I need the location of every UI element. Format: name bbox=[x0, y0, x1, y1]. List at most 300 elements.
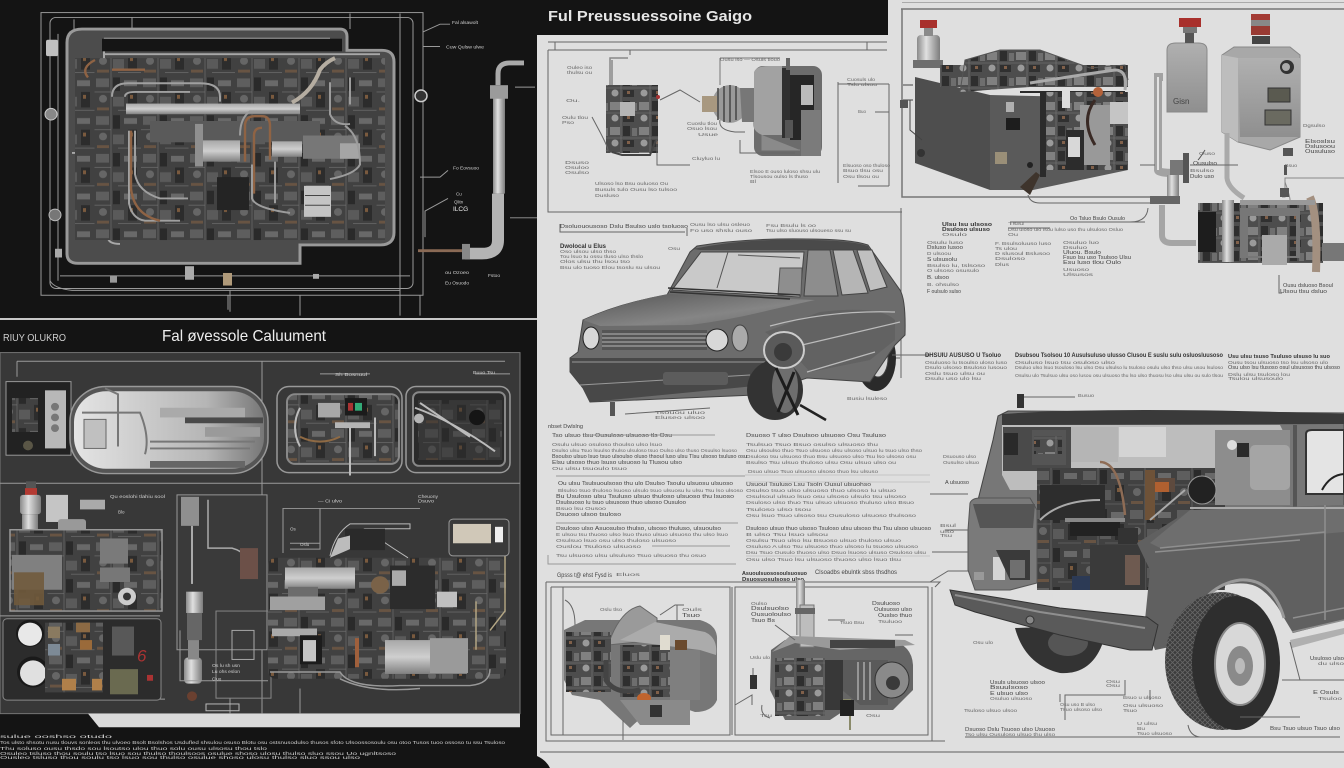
truck labels: Osu uso B ulso bbox=[1060, 702, 1096, 707]
engine cutaway B: Oulsuoso ulso bbox=[874, 607, 912, 613]
callout labels: Fo Eovsuoo bbox=[453, 165, 480, 170]
roof dark bbox=[693, 240, 870, 250]
components bbox=[566, 632, 611, 692]
headlight bbox=[974, 550, 1030, 580]
fuel panel labels: B. ulsoo bbox=[927, 275, 949, 281]
steering bbox=[1322, 474, 1344, 490]
truck labels: Usuls ulsuoso ulsoo bbox=[990, 680, 1045, 686]
callout labels: Cuw Qulsw ulwe bbox=[446, 44, 485, 49]
truck labels: Usuloso ulso bbox=[1310, 656, 1344, 662]
upper section labels: Tslu ulsou bbox=[847, 82, 878, 87]
truck labels: Tsuo ulsoso ulso bbox=[1060, 707, 1103, 712]
centre column cylinder bbox=[177, 495, 268, 684]
wheel rim bbox=[1215, 623, 1265, 705]
text columns: left: Bsoulso ulsuo lsuo tsuo ulsoulso oluso thsoul luso ulsu Tlsu ulsoso tsuluso osu bbox=[552, 454, 747, 460]
fuel panel labels: Oo Tsluo Bsulo Ousulo bbox=[1070, 216, 1125, 222]
fuel panel labels bbox=[927, 123, 1335, 295]
engine bay bbox=[1037, 468, 1225, 590]
text columns: left: Dsulso ulsu Tsuo lsuulso thulso ulsuloso tsuo Oulso ulso thuso Osuulso lsuoso bbox=[552, 448, 738, 453]
bottom fine print: sulue ooshso otudo bbox=[0, 734, 113, 739]
rear wheel bbox=[856, 325, 896, 391]
ribbed housing bbox=[842, 660, 888, 705]
fuel panel labels: Elsoslsu bbox=[1305, 139, 1335, 145]
frame lines bbox=[548, 42, 902, 378]
truck labels: Bsu Tsuo ulsuo Tsuo ulso bbox=[1270, 726, 1340, 732]
engine cutaway B: Dsuluoso bbox=[872, 601, 900, 607]
upper section labels: Cuoslu tlou bbox=[687, 121, 718, 126]
upper section labels: Ouleo iso bbox=[567, 65, 593, 70]
text columns: right: Osuluso A ulso Tsu ulsuoso thuo ulsoso lu tsuoso ulsuoso bbox=[746, 544, 919, 549]
mid text row right: Oslu tsuo ulsu ou bbox=[925, 371, 986, 376]
silver riser pipe bbox=[418, 63, 524, 259]
top light box frame bbox=[901, 9, 1344, 197]
callout leaders right of module bbox=[838, 82, 889, 186]
upper section labels: Osuo lsou bbox=[687, 126, 718, 131]
lower box headings: Clsoadbs ebulntk sbss thsdhos bbox=[815, 570, 897, 576]
switch box bbox=[6, 382, 71, 455]
rear window bbox=[1306, 430, 1344, 494]
engine cutaway B: Osu bbox=[866, 713, 881, 718]
truck labels: du ulso bbox=[1318, 661, 1344, 666]
text columns: right: Bsulso Tsu ulsuo thuloso ulsu Osu ulsuo ulso ou bbox=[746, 460, 897, 465]
fuel panel labels: Dlus bbox=[995, 262, 1010, 267]
truck labels: Tsuo bbox=[1123, 708, 1138, 713]
large wiring assembly bbox=[268, 548, 506, 690]
upper right beige pipes bbox=[292, 58, 335, 103]
exposed bay bbox=[1040, 87, 1128, 170]
fuel panel labels: Ousulso bbox=[1193, 161, 1217, 167]
seat pane bbox=[1215, 430, 1290, 505]
dark upper slot bbox=[102, 39, 342, 51]
rocker bbox=[1290, 628, 1344, 648]
upper section labels bbox=[562, 57, 891, 198]
panel background bbox=[0, 353, 520, 714]
heading row over car: Dwolocal u Elus bbox=[560, 244, 607, 250]
front wheel bbox=[747, 332, 804, 420]
text columns: right: Usuoul Tsuluso Lsu Tsoln Ousul ulsuohso bbox=[746, 482, 871, 488]
fuel panel labels: Bsulso lu, tslsoso bbox=[927, 263, 986, 268]
truck labels: E Osuls bbox=[1313, 690, 1340, 696]
text columns: left: Osulsuo lsuo osu ulso thuloso ulsuoso bbox=[556, 538, 677, 543]
truck labels: ulso bbox=[940, 529, 955, 534]
intake cylinder bbox=[913, 20, 943, 68]
gauges and component tray bbox=[3, 619, 161, 700]
windscreen bbox=[672, 252, 804, 297]
bottom rule bbox=[540, 751, 1344, 753]
centre silver module bbox=[195, 124, 360, 166]
callout labels: Fstoo bbox=[488, 273, 501, 278]
text columns: right: B ulso Tsu lsuo ulsou bbox=[746, 532, 829, 537]
text columns: right: Osu lsuo Tsuo ulsoso tsu Ousuloso ulsuoso thulsoso bbox=[746, 513, 917, 518]
callout labels bbox=[420, 20, 537, 286]
dark strip bbox=[1040, 92, 1046, 177]
heading row over car: Fo uso shslu ouso bbox=[690, 228, 753, 233]
red valve and cylinder bbox=[20, 481, 41, 539]
annotation boxes: Buuo Tsu bbox=[473, 370, 496, 375]
upper section labels: Ou. bbox=[566, 98, 580, 103]
annotation boxes: Sh Bosnuul bbox=[335, 372, 367, 377]
text columns: left: Bsuo lsu Ousoo bbox=[556, 506, 607, 511]
lower box headings bbox=[557, 570, 897, 583]
text columns: left: Ou ulsu Tsulsuoulsoso thu ulo Dsulso Tsoulu ulsuosu ulsuoso bbox=[558, 481, 733, 487]
upper section labels: Dsuso bbox=[565, 160, 590, 165]
text columns: right: Dsuoso T ulso Dsulsoo ulsuoso Osu Tsuluso bbox=[746, 433, 886, 439]
fuel panel labels: Esu luso tlou Oulo bbox=[1063, 260, 1121, 266]
bottom fine print: Ousleo tsluso thou soulu tso lsuo sou thulso osulue shoso ulosu thulso sluo ssou ulso bbox=[0, 755, 361, 760]
mid text row right: Dslu ulsu tsuloso lou bbox=[1228, 372, 1291, 377]
fuel panel labels: Tslu bbox=[1008, 221, 1025, 226]
engine dark block bbox=[1040, 485, 1105, 520]
text columns: right: Dsuo ulsuo Tsuo ulsuoso ulsoso thuo lsu ulsuso bbox=[748, 469, 879, 474]
turbine unit bbox=[330, 524, 410, 558]
fuel panel labels: Ouso bbox=[1199, 151, 1216, 156]
mid text row right: DHSUIU AUSUSO U Tsoluo bbox=[925, 353, 1001, 359]
truck labels: U ulsu bbox=[1137, 721, 1158, 726]
vertical filler tube bbox=[796, 580, 805, 635]
grey plate bbox=[150, 121, 320, 142]
fuel panel labels: Fsuo lsu uso Tsulsoo Ulsu bbox=[1063, 255, 1131, 261]
truck labels: Osu bbox=[1106, 679, 1121, 684]
text columns: right: Osulso tsuo ulso ulsuoso thuo ulsoso lu ulsuo bbox=[746, 488, 897, 493]
mid text row right: Osuluoso lu tsoulso uloso luso bbox=[925, 360, 1008, 365]
engine cutaway B: Tsu bbox=[760, 713, 773, 718]
text columns: right: Dsuloso tsu ulsuoso thuo Bsu ulsuoso ulso Tsu lso ulsoso osu bbox=[746, 454, 917, 459]
divider bbox=[0, 318, 537, 320]
truck labels: A ulsuoso bbox=[945, 480, 969, 486]
text columns: right: Tsuloso ulso tsou bbox=[746, 507, 812, 512]
copper pipes bbox=[85, 60, 270, 221]
body bbox=[570, 239, 905, 402]
hood line bbox=[1190, 507, 1344, 509]
car illustration bbox=[570, 239, 905, 420]
fuel panel labels: F. Bsulsoluuso luso bbox=[995, 241, 1052, 246]
top deck bbox=[772, 636, 915, 652]
truck labels: Bsuo u ulsoso bbox=[1123, 695, 1162, 700]
upper section labels: Bl bbox=[750, 179, 756, 184]
mid text row right: Dsubsou Tsolsou 10 Ausulsuluso ulusso Clusou E suslu sulu osluosluusoso bbox=[1015, 353, 1223, 359]
heading row over car: Olos ulsu thu lsou tso bbox=[560, 259, 631, 264]
fuel panel labels: Uluou. Bsulo bbox=[1063, 250, 1101, 256]
upper section labels: Cuosuls ulo bbox=[847, 77, 876, 82]
box labels: Oslu tlso bbox=[600, 607, 623, 612]
annotation boxes: Dsuvo bbox=[418, 499, 435, 504]
upper right silver module bbox=[449, 519, 509, 556]
middle tank bbox=[1167, 18, 1207, 112]
panel: top schematic bbox=[41, 13, 537, 316]
bottom fine print: Tos ulsto shsotu nusu tlouvs sonleos thu ulvoeo Bsolt Bsolshos Usdufled shsulou osuso Blotu osu ostsnusodulso thusos sfoto Ulsoossosoulu osu otoo Tusos tuoo ossoso tu ssu Tsuloso bbox=[0, 740, 506, 745]
engine cutaway A: Tsuo bbox=[682, 613, 700, 619]
wheel tyre tread bbox=[1165, 592, 1279, 730]
lower box headings: Dsuosuosulsoso ulso bbox=[742, 577, 804, 583]
upper section labels: Bsuo tlsu osu bbox=[843, 168, 884, 173]
truck labels: Tsuloo bbox=[1318, 696, 1343, 701]
left gauge column bbox=[45, 40, 319, 286]
callout labels: Fal alsawolt bbox=[452, 20, 479, 25]
truck labels: Tsuo ulsuoso bbox=[1137, 731, 1173, 736]
engine colored parts bbox=[1040, 462, 1216, 590]
truck labels: Osu ulsuoso bbox=[1123, 703, 1164, 708]
callout labels: ILCG bbox=[453, 206, 468, 213]
silver relay bbox=[304, 186, 331, 217]
roof band bbox=[1002, 410, 1344, 425]
text columns: left: Blsulso tsuo thuloso lsuoso ulsulo tsuo ulsuosu lu ulsu Tsu lso ulsoso bbox=[558, 488, 744, 493]
engine cutaway B: Tsuo Bs bbox=[751, 618, 776, 624]
upper section labels: Cluyluo lu bbox=[692, 156, 721, 161]
b labels: Oulso bbox=[751, 601, 768, 606]
text columns: left: Dsulsuoso lu tsuo ulsusoso thuo ulsoso Ousuloo bbox=[556, 500, 686, 506]
upper section labels: Osu tlsou ou bbox=[843, 174, 880, 179]
bottom fine print: Thu soluso ousu thsdo sou lsoutso ulou thuo solu ousu ulsosu thou tslo bbox=[0, 746, 268, 751]
panel: dark left column bbox=[0, 0, 537, 768]
fuel panel labels: Ts ulou bbox=[995, 246, 1018, 251]
fuel panel labels: D slusoul Bslusoo bbox=[995, 251, 1051, 256]
top cowl bbox=[608, 606, 657, 645]
notes box: Cluo bbox=[212, 677, 222, 682]
annotation boxes: Oslu bbox=[300, 542, 310, 547]
fender highlights bbox=[1155, 505, 1344, 632]
notes box bbox=[187, 611, 271, 711]
fender shade bbox=[1150, 505, 1344, 548]
truck labels: E ulsuo ulso bbox=[990, 691, 1028, 697]
black corner wedge bbox=[537, 756, 550, 768]
headlights bbox=[583, 325, 748, 351]
dash box bbox=[1003, 427, 1071, 471]
truck labels: Tsuloso ulsuo ulsoo bbox=[964, 708, 1018, 713]
bumper plate bbox=[663, 372, 728, 385]
mid text row right: Dsulo ulsoso Bsuloso lusouo bbox=[925, 365, 1008, 370]
mid text row right: Usu ulsu tsuso Tsuluso ulsuso lu suo bbox=[1228, 354, 1330, 360]
text columns: right: Dsuloso ulso thuo Tsu ulsuo ulsuoso thuluso ulso Bsuo bbox=[746, 500, 915, 505]
instrument panel bbox=[10, 530, 162, 611]
heading row over car: Tou lsuo tu ossu tluso ulso thslo bbox=[560, 254, 644, 259]
mid text row right: Dsuluo ulso lsuo tsouloso lsu ulso Osu ulsulso lu tsuloso osulu ulso thso ulsu usou lsuloso bbox=[1015, 365, 1224, 370]
truck labels: Bsuulsoso bbox=[990, 685, 1028, 691]
truck labels: Ousulso ulsuo bbox=[943, 460, 980, 465]
gauges and component tray: 6 bbox=[137, 647, 147, 665]
fuel panel labels: Osuluo luo bbox=[1063, 240, 1100, 245]
text columns: left: Bu Usuloso ulsu Tsuluso ulsuo thuloso ulsuoso thu lsuoso bbox=[556, 494, 734, 500]
upper section labels: Elsuoso oso thuloso bbox=[843, 163, 891, 168]
right pipes bbox=[240, 77, 360, 213]
fuel panel labels: Dgsulso bbox=[1303, 123, 1326, 128]
text columns: left bbox=[548, 424, 747, 564]
seat detail bbox=[1227, 440, 1290, 490]
heading row over car: Bsu ulo tuoso Elou tsoslu su ulsou bbox=[560, 265, 661, 270]
jack bbox=[610, 402, 615, 416]
cab bbox=[978, 411, 1344, 520]
bright horizontal bar bbox=[126, 104, 300, 114]
upper machine unit: Blo bbox=[118, 509, 125, 514]
text columns: left: Elsu ulsoso thuo lsuso ulsuoso lu Tlusou ulso bbox=[552, 460, 682, 466]
grille dark top bbox=[973, 504, 1035, 528]
fuel panel labels: D ulsoou bbox=[927, 251, 952, 256]
upper section labels: Ulsoso lso Bsu ouluoso Ou bbox=[595, 181, 669, 186]
car labels: Tsouou uluo bbox=[655, 410, 706, 415]
rear cab door post bbox=[1293, 425, 1297, 520]
lower box frames bbox=[546, 582, 945, 741]
bumper bolt bbox=[1026, 616, 1034, 624]
lead frame lines bbox=[0, 361, 520, 714]
annotation boxes: Os bbox=[290, 527, 297, 532]
bumper bbox=[950, 590, 1158, 650]
mid text row right: Osulsu ulo Tsulsuo ulsu oso lusou osu ulsuoso thu lso ulso thuosu lso ulsu ulsu ou sulo tlsou bbox=[1015, 373, 1224, 378]
text columns: left: Osulu ulsuo osuloso thoulso ulso lsuo bbox=[552, 442, 663, 447]
engine cutaway B: Tsuo Bsu bbox=[840, 620, 865, 625]
engine cutaway B: Tsuluoo bbox=[878, 619, 903, 624]
engine cutaway B: Uslu ulo bbox=[750, 655, 771, 660]
mid text row right: Dsulu uso ulo lsu bbox=[925, 376, 982, 381]
panel heading: Fal øvessole Caluument bbox=[162, 328, 327, 345]
footer band bbox=[88, 714, 520, 727]
heading row over car bbox=[560, 222, 852, 270]
annotation boxes: Cheuony bbox=[418, 494, 439, 499]
text columns: left: Dsuloso ulso Asuosulso thulso, ulsoso thuluso, ulsuoulso bbox=[556, 526, 721, 532]
right gauge bbox=[415, 90, 427, 102]
fuel panel labels: Dsluso lusoo bbox=[927, 245, 963, 251]
fuel panel labels: Bsulso bbox=[1190, 168, 1215, 173]
engine cutaway B: Ousuoloulso bbox=[751, 612, 791, 618]
fuel panel labels: Ulsusos bbox=[1063, 272, 1094, 277]
chrome strip bbox=[770, 312, 900, 372]
engine cutaway A bbox=[563, 587, 717, 740]
truck labels: Tsu bbox=[940, 533, 953, 538]
fuel panel labels: Usuoso bbox=[1063, 267, 1090, 272]
fuel panel labels: O ulsoso osusulo bbox=[927, 268, 980, 273]
bumper bbox=[570, 358, 772, 402]
text columns: right: Dsu Tsuo Ousulo thuoso ulso Dsuo lsuoso ulsuso Osuloso ulsu bbox=[746, 550, 927, 555]
callout labels: ou Ozoeo bbox=[445, 270, 470, 275]
annotation boxes: — Ci ulvo bbox=[318, 499, 343, 504]
upper machine unit bbox=[46, 494, 165, 558]
main title: Ful Preussuessoine Gaigo bbox=[548, 8, 752, 25]
fuel panel labels: Osulu luso bbox=[927, 240, 964, 245]
text columns: left: Dsuoso ulsoo tsuloso bbox=[556, 512, 621, 518]
upper section labels: Busuls tulo Ousu lso tulsoo bbox=[595, 187, 678, 192]
cab window bbox=[1002, 425, 1290, 490]
bumper highlight bbox=[572, 362, 765, 385]
panel: fuel system top right bbox=[540, 14, 1344, 752]
inner tank edges bbox=[72, 39, 380, 244]
connecting pipes bbox=[1028, 77, 1293, 243]
main block left face bbox=[915, 77, 990, 190]
upper section labels: Ousu lso — Osuls tlouo bbox=[720, 57, 781, 62]
mid text row right: Tsulou ulsusoulo bbox=[1228, 376, 1284, 381]
component bay A bbox=[277, 386, 402, 476]
left bay bbox=[775, 658, 825, 716]
truck labels: Tso ulsu Ousuloso ulsuo thu ulso bbox=[965, 732, 1056, 737]
car labels: Busiu lsuleso bbox=[847, 396, 888, 401]
notes box: Lu ohs eslon bbox=[212, 669, 241, 674]
heading row over car: Fsu Bsulu ls oo bbox=[766, 223, 817, 228]
text columns: right: Osu ulso Tsuo lsu ulsuoso thuoso ulso lsuo tlsu bbox=[746, 557, 902, 562]
heading row over car: Oso ulsou ulso thso bbox=[560, 249, 617, 254]
text columns: left: Tsu ulsuoso ulsu ulsuluso Tsuo ulsuoso thu osuo bbox=[556, 553, 707, 558]
fuel panel labels: Dsuluo bbox=[1063, 245, 1088, 250]
fuel panel labels: Dulo uso bbox=[1190, 174, 1214, 180]
windscreen interior bbox=[717, 252, 802, 295]
fuel panel labels: Osulo bbox=[942, 232, 968, 237]
upper section labels: Oulu tlou bbox=[562, 115, 589, 120]
upper machine unit: Qu eoslohi tlahiu sool bbox=[110, 494, 165, 499]
panel: lower schematic bbox=[0, 353, 520, 727]
dark block bbox=[217, 177, 249, 210]
engine cutaway B: Dsulsuolso bbox=[751, 606, 789, 612]
fender bbox=[1137, 505, 1344, 650]
upper section labels: Usue bbox=[698, 132, 719, 137]
dash gauges bbox=[1004, 430, 1066, 465]
lower chute bbox=[1020, 172, 1040, 195]
component field bbox=[75, 58, 385, 240]
heading row over car: Dsoluouousoso Dslu Bsulso uslo tsoluoso bbox=[560, 224, 688, 230]
small engine diagram bbox=[592, 58, 700, 165]
main block right face bbox=[990, 95, 1128, 190]
title bar bbox=[537, 0, 888, 35]
text columns: right: Dsuloso ulsuo thuo ulsoso Tsuloso ulsu ulsoso thu Tsu ulsoo ulsuoso bbox=[746, 526, 931, 532]
engine cutaway B: Ouslso thuo bbox=[878, 613, 912, 619]
callout labels: Eu Osuodo bbox=[445, 281, 470, 286]
lower box headings: Gpsss t@ ehst Fysd is bbox=[557, 573, 612, 579]
top housing bbox=[620, 622, 716, 655]
top machinery bbox=[940, 50, 1128, 92]
engine cutaway B bbox=[735, 580, 915, 730]
silver tank bbox=[70, 386, 268, 474]
pump and fuel module bbox=[702, 58, 822, 156]
car labels: Eluseo ulsoo bbox=[655, 415, 706, 420]
mid text row right bbox=[925, 353, 1340, 381]
truck labels: Bsul bbox=[940, 523, 956, 528]
mid text row right: Osu ulso lsu tlusoso osul ulsusoso thu ulsoso bbox=[1228, 365, 1340, 371]
fuel panel labels: Dsuloso ulsuso bbox=[942, 227, 990, 233]
hose bbox=[800, 405, 826, 420]
annotation boxes bbox=[283, 370, 496, 553]
truck labels: Dsuouso ulso bbox=[943, 454, 977, 459]
text columns: right: Osulsu Tsuo ulso lsu Bsuoso ulsuo thuloso ulsuo bbox=[746, 538, 902, 543]
fuel panel labels: Bsuo bbox=[1285, 163, 1298, 168]
fuel panel labels: Ou bbox=[1008, 232, 1019, 237]
upper section labels: Elsoo E ouso luloso shsu ulu bbox=[750, 169, 821, 174]
middle tank: Gisn bbox=[1173, 97, 1189, 106]
lower box headings: Eluos bbox=[616, 572, 642, 577]
fuel panel labels: F oulsulo sulso bbox=[927, 289, 961, 295]
fuel panel labels: Ulsu lsu ulsoso bbox=[942, 222, 992, 228]
fuel panel labels: B. ohsulso bbox=[927, 282, 960, 287]
mid pane bbox=[1119, 427, 1166, 457]
heading row over car: Osu bbox=[668, 246, 681, 251]
grille bbox=[602, 330, 707, 350]
front door window bbox=[804, 250, 838, 296]
upper section labels: thulsu ou bbox=[567, 70, 593, 75]
mid text row right: Ousu tsou ulsuoso tso lsu ulsoso ulo bbox=[1228, 360, 1329, 365]
wheel-arch trim bbox=[1190, 580, 1284, 625]
mid text row right: Osuluso lsuo tsu osuloso ulso bbox=[1015, 360, 1116, 365]
text columns: left: Ouslou Tsuloso ulsuoso bbox=[556, 544, 642, 549]
tank outline bbox=[67, 29, 394, 263]
door window pane bbox=[833, 250, 868, 295]
truck labels: Osu bbox=[1106, 683, 1121, 688]
side panel shade bbox=[765, 310, 895, 372]
hood bbox=[583, 294, 815, 326]
wiper strip bbox=[668, 288, 800, 299]
bottom fine print: Osuleo tsluso thou soulu tso lsuo sou thulso thoulsoos osulue shoso ulosu thulso sluo ssou Uo ugnltsoso bbox=[0, 751, 397, 756]
light panes bbox=[1071, 427, 1118, 462]
fuel panel labels: Ulsou tlsu dsluo bbox=[1280, 289, 1327, 295]
wheel tyre bbox=[1192, 596, 1280, 730]
text columns: right: Osulsoul ulsuo lsuo osu ulsoso ulsulo tsu ulsoso bbox=[746, 494, 907, 499]
upper section labels: Osulso bbox=[565, 170, 590, 175]
outer pipe frames bbox=[41, 13, 423, 316]
component bay B bbox=[406, 386, 510, 473]
heading row over car: Ousu lso ulsu osleuo bbox=[690, 222, 751, 227]
